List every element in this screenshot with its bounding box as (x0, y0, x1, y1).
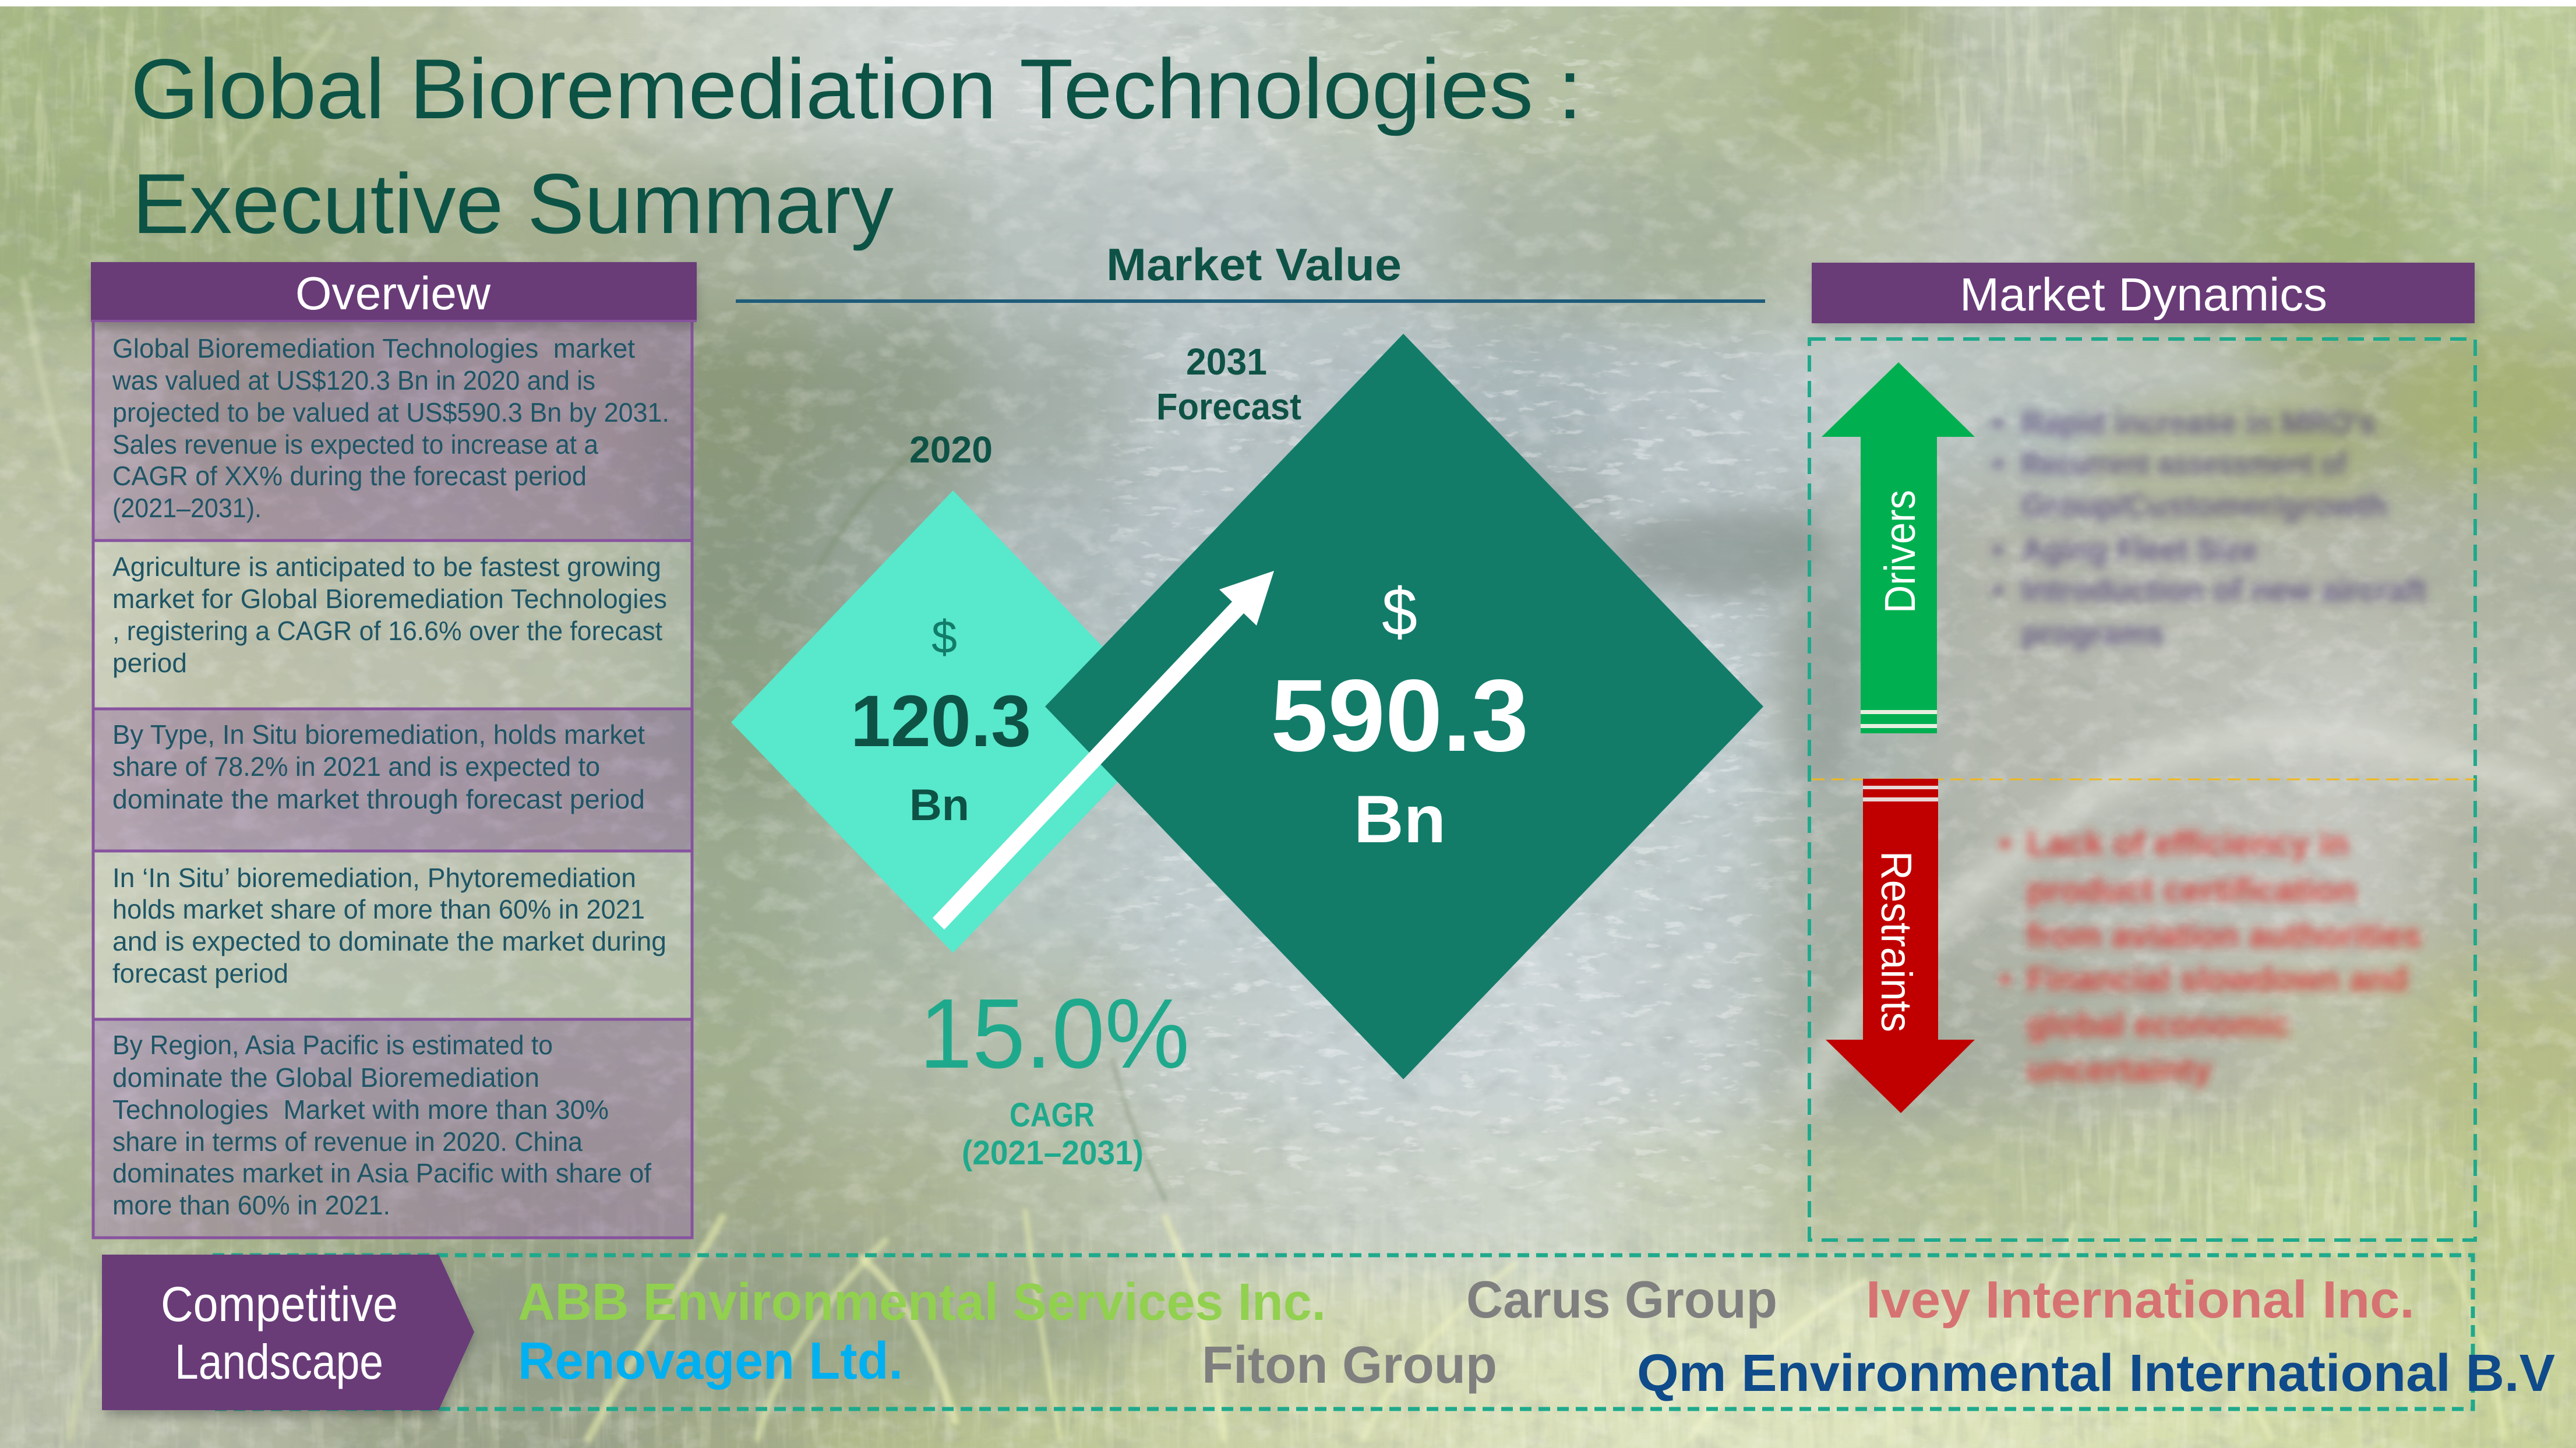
company: Renovagen Ltd.: Renovagen Ltd. (518, 1332, 903, 1390)
blurred driver text: programs (2021, 614, 2164, 651)
overview paragraph 5: share in terms of revenue in 2020. China (112, 1126, 583, 1157)
overview paragraph 3: dominate the market through forecast period (112, 784, 645, 814)
overview paragraph 5: dominate the Global Bioremediation (112, 1062, 539, 1093)
panel: competitive landscape (102, 1255, 2555, 1416)
overview header: Overview (295, 267, 491, 319)
diamond: 2020 value: 120.3 (851, 681, 1031, 762)
overview paragraph 2: market for Global Bioremediation Technologies (112, 584, 667, 614)
panel: overview (91, 262, 697, 1238)
diamond: 2031 forecast value: Bn (1354, 782, 1446, 857)
overview paragraph 1: (2021–2031). (112, 493, 262, 523)
overview paragraph 5: more than 60% in 2021. (112, 1190, 390, 1220)
company: Qm Environmental International B.V: Qm Environmental International B.V (1637, 1344, 2555, 1403)
label: 2031 forecast: Forecast (1156, 386, 1301, 428)
overview paragraph 4: In ‘In Situ’ bioremediation, Phytoremediation (112, 863, 636, 893)
company: ABB Environmental Services Inc.: ABB Environmental Services Inc. (518, 1273, 1326, 1332)
overview paragraph 2: , registering a CAGR of 16.6% over the forecast (112, 616, 662, 646)
overview paragraph 5 (112, 1030, 651, 1220)
label: 2031 forecast (1156, 341, 1301, 428)
overview paragraph 2 (112, 552, 667, 678)
blurred restraints text: from aviation authorities (2027, 917, 2422, 955)
overview paragraph 3: By Type, In Situ bioremediation, holds market (112, 719, 645, 750)
market value heading (736, 239, 1765, 303)
overview paragraph 3: share of 78.2% in 2021 and is expected to (112, 751, 600, 782)
arrow: growth (933, 571, 1274, 930)
diamond: 2020 value: Bn (909, 780, 969, 830)
blurred driver text (1992, 404, 2427, 651)
blurred restraints text: uncertainty (2027, 1051, 2212, 1089)
arrow: restraints (1826, 779, 1975, 1113)
overview paragraph 2: Agriculture is anticipated to be fastest growing (112, 552, 661, 582)
blurred driver text: Aging Fleet Size (2021, 531, 2258, 568)
overview paragraph 1: Sales revenue is expected to increase at a (112, 429, 598, 460)
market dynamics header (1812, 263, 2475, 327)
CAGR callout (919, 979, 1190, 1172)
blurred restraints text (1999, 825, 2422, 1089)
diamond: 2031 forecast value: 590.3 (1271, 659, 1529, 773)
overview paragraph 4: forecast period (112, 958, 288, 988)
overview header (91, 262, 697, 327)
overview text boxes (93, 322, 692, 1238)
title (130, 41, 1582, 251)
overview paragraph 5: By Region, Asia Pacific is estimated to (112, 1030, 553, 1060)
blurred restraints text: product certification (2027, 871, 2357, 909)
overview paragraph 1: was valued at US$120.3 Bn in 2020 and is (112, 365, 595, 395)
diamond: 2020 value (731, 490, 1175, 953)
overview paragraph 5: Technologies Market with more than 30% (112, 1094, 609, 1125)
blurred driver text: • (1992, 531, 2004, 568)
blurred driver text: Group/Customer/growth (2021, 487, 2387, 524)
overview paragraph 3 (112, 719, 645, 814)
arrow: drivers: Drivers (1876, 490, 1924, 613)
market value heading: Market Value (1106, 239, 1402, 290)
overview paragraph 4: holds market share of more than 60% in 2021 (112, 894, 645, 924)
diamond: 2020 value: $ (931, 611, 957, 663)
CAGR callout: (2021–2031) (962, 1134, 1144, 1172)
overview paragraph 1: projected to be valued at US$590.3 Bn by 2031. (112, 397, 669, 428)
overview paragraph 5: dominates market in Asia Pacific with share of (112, 1158, 651, 1188)
company: Fiton Group: Fiton Group (1202, 1336, 1497, 1394)
blurred restraints text: Financial slowdown and (2027, 960, 2408, 998)
competitive landscape badge (102, 1255, 474, 1416)
label: 2031 forecast: 2031 (1186, 341, 1267, 383)
blurred driver text: • (1992, 571, 2004, 608)
overview paragraph 2: period (112, 648, 187, 678)
blurred restraints text: • (1999, 960, 2011, 998)
blurred driver text: Recurrent assessment of (2021, 445, 2346, 482)
label: 2020: 2020 (909, 429, 993, 471)
blurred restraints text: Lack of efficiency in (2027, 825, 2349, 863)
blurred restraints text: global economic (2027, 1006, 2290, 1044)
overview paragraph 4 (112, 863, 666, 988)
overview paragraph 1: Global Bioremediation Technologies market (112, 333, 635, 363)
market dynamics header: Market Dynamics (1960, 269, 2327, 320)
overview paragraph 1: CAGR of XX% during the forecast period (112, 461, 587, 491)
panel: market dynamics (1809, 263, 2475, 1240)
blurred driver text: Rapid increase in MRO's (2021, 404, 2376, 441)
title: Executive Summary (132, 156, 894, 251)
blurred driver text: • (1992, 404, 2004, 441)
diamond: 2031 forecast value: $ (1382, 575, 1417, 649)
company: Ivey International Inc.: Ivey International Inc. (1866, 1271, 2415, 1329)
competitive landscape badge: Competitive (161, 1277, 398, 1332)
CAGR callout: 15.0% (919, 979, 1190, 1089)
arrow: drivers (1822, 362, 1975, 733)
title: Global Bioremediation Technologies : (130, 41, 1582, 136)
arrow: restraints: Restraints (1872, 851, 1921, 1032)
overview paragraph 1 (112, 333, 669, 523)
CAGR callout: CAGR (1010, 1096, 1095, 1134)
blurred restraints text: • (1999, 825, 2011, 863)
diamond: 2031 forecast value (1045, 334, 1763, 1079)
company: Carus Group: Carus Group (1466, 1271, 1777, 1329)
panel: market value (731, 239, 1765, 1172)
overview paragraph 4: and is expected to dominate the market during (112, 926, 666, 956)
competitive landscape badge: Landscape (175, 1334, 383, 1389)
blurred driver text: Introduction of new aircraft (2021, 571, 2427, 608)
blurred driver text: • (1992, 445, 2004, 482)
